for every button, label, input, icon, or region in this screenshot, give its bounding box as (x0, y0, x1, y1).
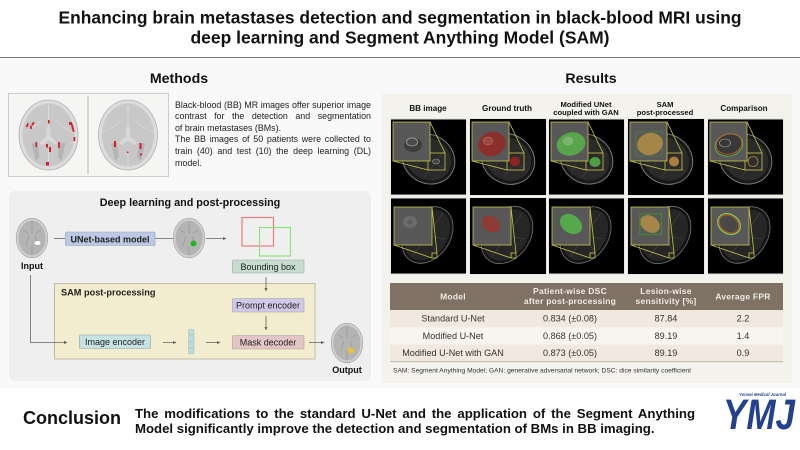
panel: brain maps (8, 94, 168, 176)
table header: Patient-wise DSC (533, 286, 607, 296)
text block: conclusion statement: The modifications to the standard U-Net and the application of the Segment Anything (135, 406, 695, 420)
header rule (0, 56, 800, 58)
image: row 1 SAM post-processed (628, 118, 704, 196)
table row: Standard U-Net (390, 310, 783, 327)
label: output: Output (332, 365, 362, 375)
box: prompt encoder (232, 298, 304, 312)
box: bounding box: Bounding box (240, 262, 296, 272)
table header: Average FPR (715, 292, 771, 302)
arrow: input to UNet (54, 238, 65, 240)
text block: methods description: train (40) and test (10) the deep learning (DL) (175, 146, 371, 156)
title: Enhancing brain metastases detection and segmentation in black-blood MRI using (58, 8, 742, 28)
icon: brain with predicted mask (173, 218, 205, 258)
table header (390, 283, 783, 310)
table header: Lesion-wise (640, 286, 692, 296)
brain map: right with metastases (98, 100, 158, 170)
table row: Modified U-Net: Modified U-Net (423, 331, 484, 341)
table row: Standard U-Net: 0.834 (±0.08) (543, 314, 597, 324)
table header: Model (440, 292, 466, 302)
panel: results (382, 94, 792, 383)
image: row 2 modified UNet with GAN (548, 197, 624, 274)
arrow: UNet to prediction (155, 238, 173, 240)
column headers: Comparison (720, 104, 768, 113)
title: deep learning and Segment Anything Model (SAM) (190, 28, 610, 48)
heading: Conclusion: Conclusion (23, 408, 121, 428)
arrow: image encoder to embedding (163, 342, 176, 344)
arrow: input to image encoder (30, 275, 67, 342)
results background band (0, 58, 800, 388)
text block: methods description: contrast for the detection and segmentation (175, 111, 371, 121)
table row: Modified U-Net with GAN: 89.19 (655, 348, 677, 358)
table header: sensitivity [%] (636, 296, 696, 306)
table row: Modified U-Net with GAN: 0.9 (737, 348, 749, 358)
icon: output brain (331, 323, 363, 363)
brain map: left with metastases (19, 100, 78, 170)
image: row 1 ground truth (470, 118, 546, 196)
box: image encoder (80, 335, 150, 348)
arrow: mask decoder to output (309, 342, 324, 344)
image: row 2 BB image (390, 197, 466, 274)
text block: conclusion statement: Model significantly improve the detection and segmentation of BMs in BB imaging. (135, 420, 654, 436)
heading: Results: Results (565, 71, 617, 87)
icon: embedding stack (188, 330, 194, 354)
SAM heading: SAM post-processing (61, 288, 155, 298)
column headers (409, 100, 768, 117)
image: row 1 modified UNet with GAN (548, 118, 624, 196)
table row: Modified U-Net: 0.868 (±0.05) (543, 331, 597, 341)
arrow: embedding to mask decoder (206, 342, 220, 344)
box: prompt encoder: Prompt encoder (236, 300, 300, 310)
image: row 2 SAM post-processed (628, 196, 704, 274)
column headers: SAM (657, 100, 673, 109)
column headers: Modified UNet (560, 100, 612, 109)
text block: methods description: Black-blood (BB) MR images offer superior image (175, 100, 371, 110)
icon: bounding boxes (242, 218, 290, 256)
table: model metrics (390, 283, 783, 362)
arrow: bounding box to prompt encoder (265, 277, 267, 291)
image: row 2 comparison (708, 197, 784, 274)
box: image encoder: Image encoder (85, 337, 145, 347)
table row: Standard U-Net: 87.84 (655, 314, 677, 324)
icon: input brain (16, 218, 48, 258)
text block: conclusion statement (135, 406, 695, 436)
logo: Yonsei Medical Journal: Yonsei Medical Journal (739, 392, 787, 397)
table row: Modified U-Net with GAN (390, 345, 783, 362)
column headers: BB image (409, 104, 447, 113)
table header: after post-processing (524, 296, 616, 306)
table row: Modified U-Net: 1.4 (737, 331, 749, 341)
table row: Modified U-Net (390, 327, 783, 345)
table row: Modified U-Net: 89.19 (655, 331, 677, 341)
label: input: Input (21, 261, 43, 271)
image: row 1 BB image (390, 118, 466, 196)
arrow: prediction to boxes (206, 238, 226, 240)
table row: Modified U-Net with GAN: 0.873 (±0.05) (543, 348, 597, 358)
box: mask decoder: Mask decoder (240, 338, 296, 348)
column headers: post-processed (637, 108, 694, 117)
text block: methods description: model. (175, 158, 202, 168)
image: row 1 comparison (708, 118, 784, 196)
box: bounding box (232, 260, 304, 273)
box: mask decoder (232, 336, 304, 349)
panel: deep learning and post-processing (9, 191, 371, 381)
column headers: coupled with GAN (553, 108, 619, 117)
box: UNet-based model: UNet-based model (70, 234, 150, 244)
table row: Modified U-Net with GAN: Modified U-Net with GAN (402, 348, 504, 358)
text block: methods description (175, 100, 371, 168)
panel heading: Deep learning and post-processing (100, 197, 280, 209)
panel: SAM post-processing (54, 284, 315, 359)
column headers: Ground truth (482, 104, 532, 113)
title (58, 8, 742, 48)
text block: methods description: of brain metastases (BMs). (175, 123, 281, 133)
heading: Methods: Methods (150, 71, 208, 87)
arrow: prompt encoder to mask decoder (265, 316, 267, 330)
table row: Standard U-Net: 2.2 (737, 314, 749, 324)
box: UNet-based model (66, 232, 155, 246)
image: row 2 ground truth (470, 196, 546, 274)
footnote: SAM: Segment Anything Model; GAN: generative adversarial network; DSC: dice similarity coefficient (393, 368, 691, 374)
text block: methods description: The BB images of 50 patients were collected to (175, 134, 371, 144)
table row: Standard U-Net: Standard U-Net (421, 314, 485, 324)
